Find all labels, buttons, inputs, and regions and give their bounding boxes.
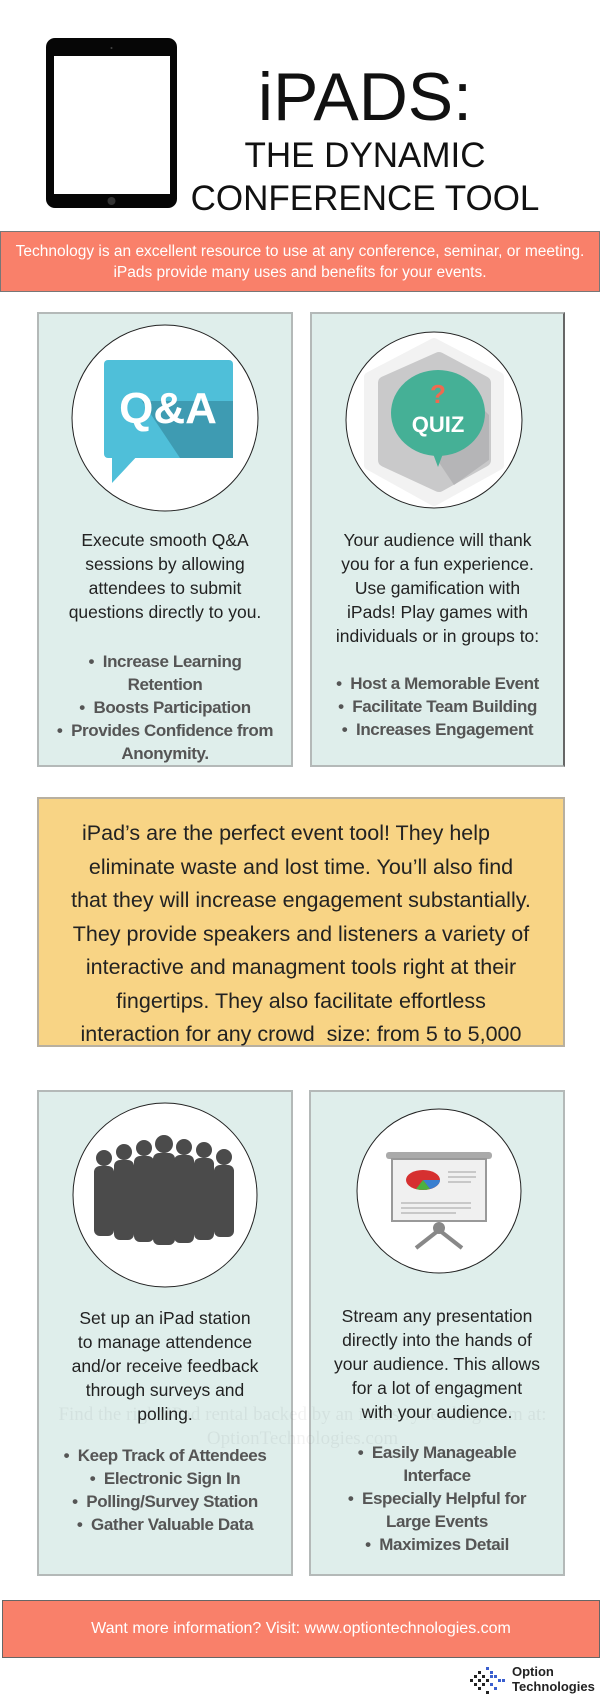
banner: intro	[0, 231, 600, 292]
title: THE DYNAMIC	[244, 136, 486, 175]
text: quiz description: Use gamification with	[355, 578, 520, 598]
text: Q&A description: Execute smooth Q&A	[81, 530, 249, 550]
list: streaming benefits: Large Events	[386, 1512, 488, 1531]
list: Q&A benefits: • Increase Learning	[89, 652, 241, 671]
text: station description	[72, 1308, 258, 1424]
list: streaming benefits: • Maximizes Detail	[365, 1535, 509, 1554]
list: quiz benefits	[336, 674, 540, 739]
watermark text	[58, 1404, 547, 1449]
text: streaming description: directly into the hands of	[342, 1330, 532, 1350]
watermark text: OptionTechnologies.com	[207, 1428, 398, 1449]
footer banner: Want more information? Visit: www.optiontechnologies.com	[91, 1620, 511, 1637]
banner: intro: iPads provide many uses and benefits for your events.	[113, 264, 487, 281]
panel: quiz	[310, 312, 565, 767]
list: Q&A benefits: • Boosts Participation	[79, 698, 251, 717]
panel: summary: interaction for any crowd size: from 5 to 5,000	[81, 1022, 521, 1046]
title: CONFERENCE TOOL	[191, 179, 539, 218]
panel: summary: eliminate waste and lost time. You’ll also find	[89, 854, 513, 878]
icon: presentation board	[356, 1108, 522, 1274]
panel: summary	[37, 797, 565, 1047]
icon: Q&A bubble: Q&A	[119, 384, 217, 433]
list: station benefits: • Electronic Sign In	[90, 1469, 240, 1488]
text: station description: polling.	[137, 1404, 193, 1424]
icon: quiz bubble	[346, 332, 522, 508]
footer banner	[2, 1600, 600, 1658]
text: streaming description: with your audience.	[362, 1402, 512, 1422]
text: streaming description: Stream any presentation	[342, 1306, 532, 1326]
watermark text: Find the right iPad rental backed by an industry leading team at:	[58, 1404, 547, 1425]
text: station description: to manage attendence	[78, 1332, 252, 1352]
list: Q&A benefits: Anonymity.	[121, 744, 209, 763]
panel: Q&A	[37, 312, 293, 767]
icon: ipad	[46, 38, 177, 208]
list: quiz benefits: • Host a Memorable Event	[336, 674, 539, 693]
panel: summary: interactive and managment tools right at their	[86, 955, 516, 979]
list: streaming benefits	[348, 1443, 526, 1554]
panel: attendance	[37, 1090, 293, 1576]
list: Q&A benefits: Retention	[128, 675, 202, 694]
list: streaming benefits: • Especially Helpful for	[348, 1489, 526, 1508]
text: streaming description: your audience. This allows	[334, 1354, 540, 1374]
icon: quiz bubble: QUIZ	[412, 412, 464, 437]
panel: summary: iPad’s are the perfect event tool! They help	[82, 821, 490, 845]
text: Q&A description: attendees to submit	[89, 578, 241, 598]
logo: Option Technologies: Technologies	[512, 1679, 595, 1694]
text: streaming description: for a lot of engagment	[352, 1378, 522, 1398]
text: Q&A description	[69, 530, 261, 622]
banner: intro: Technology is an excellent resource to use at any conference, seminar, or meeting.	[16, 243, 584, 260]
text: quiz description: iPads! Play games with	[347, 602, 528, 622]
panel: summary: fingertips. They also facilitate effortless	[116, 988, 486, 1012]
list: Q&A benefits	[57, 652, 273, 763]
list: quiz benefits: • Facilitate Team Building	[338, 697, 537, 716]
text: Q&A description: questions directly to you.	[69, 602, 261, 622]
text: quiz description	[336, 530, 539, 646]
list: station benefits: • Gather Valuable Data	[77, 1515, 253, 1534]
panel: summary: They provide speakers and listeners a variety of	[73, 922, 529, 946]
text: quiz description: Your audience will thank	[343, 530, 532, 550]
text: Q&A description: sessions by allowing	[85, 554, 245, 574]
icon: Q&A bubble	[72, 324, 258, 512]
list: station benefits: • Polling/Survey Station	[72, 1492, 258, 1511]
logo: Option Technologies	[470, 1664, 595, 1694]
panel: summary: that they will increase engagement substantially.	[71, 888, 531, 912]
text: station description: Set up an iPad station	[79, 1308, 251, 1328]
list: station benefits: • Keep Track of Attendees	[64, 1446, 266, 1465]
text: quiz description: you for a fun experience.	[341, 554, 534, 574]
list: quiz benefits: • Increases Engagement	[342, 720, 533, 739]
icon: people silhouette	[72, 1102, 258, 1288]
logo: Option Technologies: Option	[512, 1664, 554, 1679]
title: iPADS:	[258, 59, 472, 135]
panel: presentation	[309, 1090, 565, 1576]
text: streaming description	[334, 1306, 540, 1422]
icon: quiz bubble: ?	[430, 379, 446, 409]
title	[191, 59, 539, 218]
text: station description: through surveys and	[86, 1380, 244, 1400]
list: streaming benefits: • Easily Manageable	[358, 1443, 516, 1462]
list: station benefits	[64, 1446, 266, 1534]
list: streaming benefits: Interface	[403, 1466, 471, 1485]
list: Q&A benefits: • Provides Confidence from	[57, 721, 273, 740]
text: quiz description: individuals or in groups to:	[336, 626, 539, 646]
text: station description: and/or receive feedback	[72, 1356, 258, 1376]
